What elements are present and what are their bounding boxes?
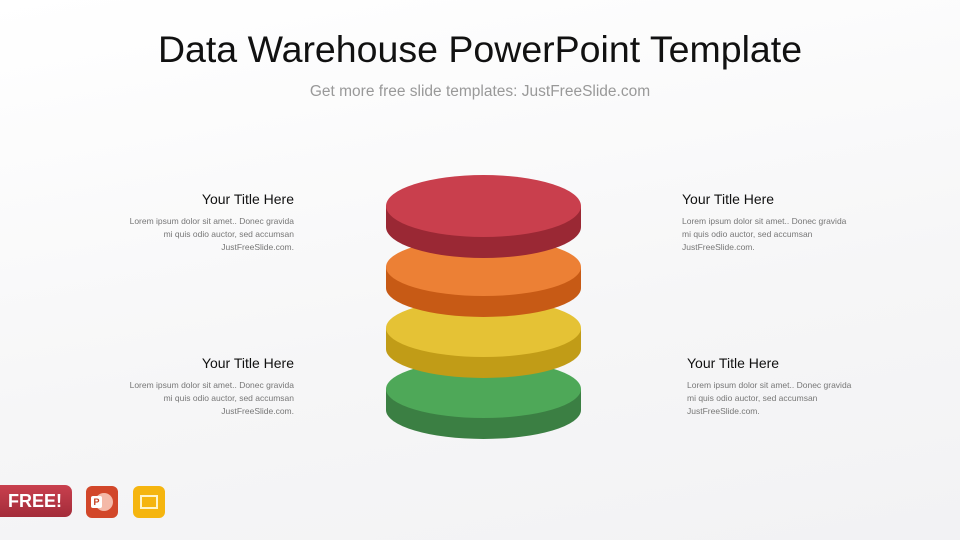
text block: top right [682, 191, 846, 252]
title: Data Warehouse PowerPoint Template [158, 28, 802, 70]
text block: bottom left: Your Title Here [202, 355, 294, 371]
disk: green [386, 360, 581, 439]
text block: bottom right [687, 355, 852, 416]
subtitle: Get more free slide templates: JustFreeSlide.com [310, 83, 650, 100]
text block: top left: Your Title Here [202, 191, 294, 207]
disk: yellow [386, 299, 581, 378]
text block: top right: Lorem ipsum dolor sit amet.. Donec gravida mi quis odio auctor, sed accumsan JustFreeSlide.com. [682, 216, 846, 252]
badge: FREE: FREE! [8, 491, 62, 511]
text block: bottom left [130, 355, 294, 416]
badge: FREE [0, 485, 72, 517]
disk: red [386, 175, 581, 258]
text block: top left [130, 191, 294, 252]
text block: bottom left: Lorem ipsum dolor sit amet.. Donec gravida mi quis odio auctor, sed accumsan JustFreeSlide.com. [130, 380, 294, 416]
icon: PowerPoint: P [93, 497, 100, 507]
disk: orange [386, 238, 581, 317]
text block: bottom right: Your Title Here [687, 355, 779, 371]
text block: top left: Lorem ipsum dolor sit amet.. Donec gravida mi quis odio auctor, sed accumsan JustFreeSlide.com. [130, 216, 294, 252]
icon: PowerPoint [86, 486, 118, 518]
icon: Google Slides [133, 486, 165, 518]
text block: top right: Your Title Here [682, 191, 774, 207]
text block: bottom right: Lorem ipsum dolor sit amet.. Donec gravida mi quis odio auctor, sed accumsan JustFreeSlide.com. [687, 380, 851, 416]
